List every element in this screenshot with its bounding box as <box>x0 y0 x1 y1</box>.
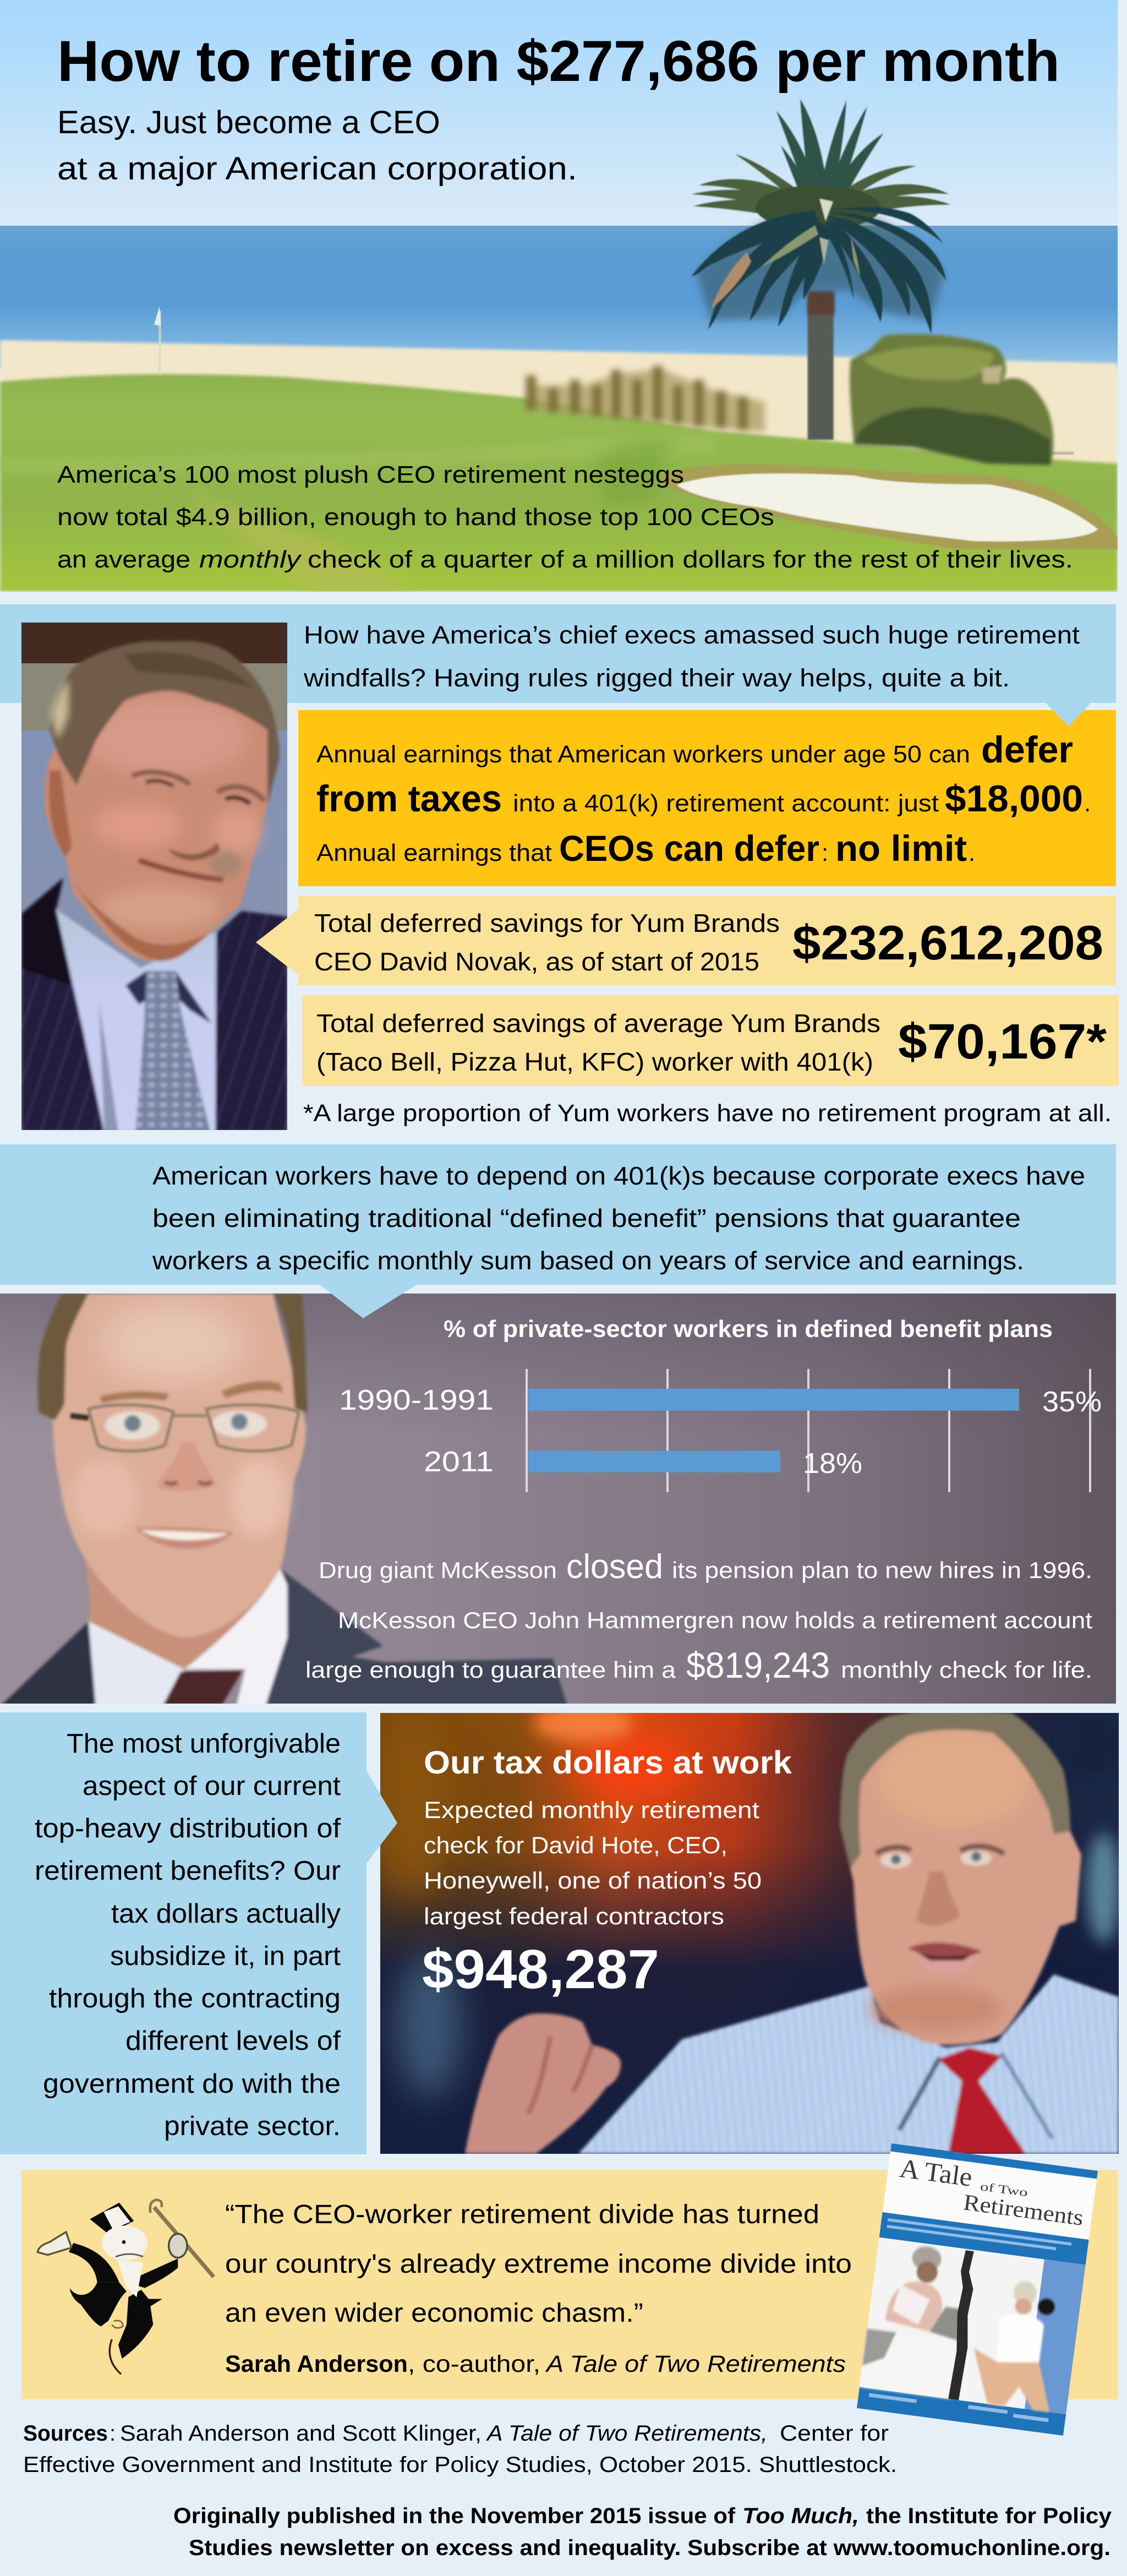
question text: windfalls? Having rules rigged their way helps, quite a bit. <box>303 664 1010 692</box>
worker savings figure: $70,167* <box>898 1014 1107 1069</box>
sources: : <box>110 2421 116 2446</box>
deferral text: . <box>1084 790 1091 817</box>
question text: How have America’s chief execs amassed such huge retirement <box>304 621 1080 649</box>
quote text: our country's already extreme income divide into <box>225 2250 852 2279</box>
publication credit: Originally published in the November 2015 issue of <box>173 2504 736 2528</box>
publication credit: Studies newsletter on excess and inequality. Subscribe at www.toomuchonline.org. <box>189 2536 1110 2560</box>
sources: Sources <box>23 2421 108 2446</box>
deferral text: $18,000 <box>945 778 1083 820</box>
intro text: check of a quarter of a million dollars for the rest of their lives. <box>308 546 1073 573</box>
bar: 1990-1991: 1990-1991 <box>339 1384 494 1416</box>
description: largest federal contractors <box>424 1903 724 1930</box>
subsidy text: aspect of our current <box>83 1771 341 1801</box>
Novak savings label: CEO David Novak, as of start of 2015 <box>314 947 759 976</box>
illustration: report cover, A Tale of Two Retirements: Retirements <box>962 2190 1085 2230</box>
worker savings label <box>316 1009 880 1076</box>
quote text: “The CEO-worker retirement divide has turned <box>225 2200 819 2229</box>
pension text: workers a specific monthly sum based on years of service and earnings. <box>152 1246 1024 1275</box>
bar: 1990-1991: 35% <box>1042 1386 1102 1418</box>
subsidy text <box>35 1729 341 2141</box>
McKesson text: monthly check for life. <box>841 1657 1092 1683</box>
footnote: *A large proportion of Yum workers have no retirement program at all. <box>303 1100 1112 1127</box>
subtitle: at a major American corporation. <box>57 151 577 187</box>
deferral text: : <box>822 839 828 866</box>
description: Expected monthly retirement <box>424 1797 759 1824</box>
icon: Monopoly man <box>37 2200 214 2374</box>
question text <box>303 621 1080 692</box>
panel: John Hammergren photo with chart <box>0 1294 1116 1706</box>
bar: 1990-1991 <box>339 1384 1102 1418</box>
pension text: American workers have to depend on 401(k)s because corporate execs have <box>152 1161 1085 1190</box>
publication credit: the Institute for Policy <box>866 2504 1112 2528</box>
chart title: % of private-sector workers in defined benefit plans <box>444 1316 1053 1342</box>
deferral text: Annual earnings that <box>316 839 552 866</box>
subsidy text: tax dollars actually <box>111 1899 341 1929</box>
panel: hero beach photo with title <box>0 0 1118 592</box>
attribution: , co-author, <box>408 2351 540 2377</box>
subtitle: Easy. Just become a CEO <box>57 105 440 140</box>
deferral text: no limit <box>835 828 967 869</box>
sources: Effective Government and Institute for Policy Studies, October 2015. Shuttlestock. <box>23 2453 897 2477</box>
McKesson text: McKesson CEO John Hammergren now holds a retirement account <box>338 1607 1092 1633</box>
illustration: report cover, A Tale of Two Retirements: of Two <box>980 2180 1028 2200</box>
subsidy text: government do with the <box>43 2069 341 2099</box>
subsidy text: subsidize it, in part <box>110 1941 341 1971</box>
worker savings label: Total deferred savings of average Yum Brands <box>316 1009 880 1038</box>
intro text: now total $4.9 billion, enough to hand those top 100 CEOs <box>57 504 774 531</box>
intro text: America’s 100 most plush CEO retirement nesteggs <box>57 461 684 488</box>
worker savings label: (Taco Bell, Pizza Hut, KFC) worker with 401(k) <box>316 1047 873 1076</box>
attribution: A Tale of Two Retirements <box>545 2351 846 2377</box>
McKesson text: large enough to guarantee him a <box>305 1657 676 1683</box>
bar: 2011 <box>424 1446 862 1480</box>
subsidy text: top-heavy distribution of <box>35 1814 341 1843</box>
bar chart: defined benefit coverage <box>339 1369 1102 1492</box>
deferral text: from taxes <box>316 778 502 820</box>
subsidy text: different levels of <box>125 2026 341 2056</box>
panel: yellow 401(k) vs CEO deferral rules <box>298 710 1116 886</box>
sources: A Tale of Two Retirements, <box>486 2421 768 2446</box>
McKesson text: $819,243 <box>686 1645 830 1685</box>
McKesson text: closed <box>566 1548 663 1586</box>
intro text: monthly <box>199 546 303 573</box>
publication credit: Too Much, <box>742 2504 859 2528</box>
Novak savings label: Total deferred savings for Yum Brands <box>314 909 780 937</box>
attribution: Sarah Anderson <box>225 2351 408 2377</box>
intro text: an average <box>57 546 190 573</box>
illustration: report cover, A Tale of Two Retirements <box>857 2143 1098 2436</box>
photo: David Novak portrait <box>21 623 287 1132</box>
panel: quote <box>21 2170 1118 2399</box>
sources: Sarah Anderson and Scott Klinger, <box>120 2421 482 2446</box>
subsidy text: retirement benefits? Our <box>35 1856 341 1886</box>
illustration: report cover, A Tale of Two Retirements: A Tale <box>898 2153 974 2192</box>
description: Honeywell, one of nation’s 50 <box>424 1868 762 1894</box>
photo: John Hammergren portrait <box>0 1294 1116 1706</box>
sources <box>23 2421 897 2477</box>
subsidy text: The most unforgivable <box>67 1729 341 1759</box>
attribution <box>225 2351 846 2377</box>
panel: tax subsidy text <box>0 1712 397 2154</box>
panel: David Cote photo with tax dollars text <box>374 1704 1127 2154</box>
Novak savings figure: $232,612,208 <box>792 915 1103 970</box>
deferral text: Annual earnings that American workers under age 50 can <box>316 741 970 768</box>
title: How to retire on $277,686 per month <box>57 29 1060 94</box>
panel: average worker savings <box>302 995 1119 1086</box>
sources: Center for <box>780 2421 889 2446</box>
quote text <box>225 2200 852 2328</box>
subtitle <box>57 105 577 187</box>
subsidy text: private sector. <box>164 2111 341 2141</box>
panel: question band <box>0 604 1116 703</box>
photo: Honeywell CEO portrait <box>374 1704 1127 2154</box>
panel: pension explanation band <box>0 1144 1116 1285</box>
McKesson text: its pension plan to new hires in 1996. <box>672 1557 1092 1583</box>
bar: 2011: 18% <box>803 1448 862 1480</box>
panel: Novak deferred savings <box>256 896 1116 985</box>
subsidy text: through the contracting <box>49 1984 341 2013</box>
heading: Our tax dollars at work <box>424 1745 792 1781</box>
deferral text: CEOs can defer <box>559 828 819 869</box>
photo: golf course by the sea <box>0 0 1118 592</box>
intro text <box>57 461 1073 573</box>
pension text <box>152 1161 1085 1275</box>
deferral text: defer <box>981 729 1073 771</box>
deferral text: . <box>969 839 975 866</box>
Novak savings label <box>314 909 780 976</box>
description: check for David Hote, CEO, <box>424 1832 727 1859</box>
deferral text <box>316 729 1091 869</box>
arrow: pension band pointing to chart panel <box>320 1285 417 1318</box>
McKesson text <box>305 1548 1092 1685</box>
description <box>424 1797 762 1930</box>
quote text: an even wider economic chasm.” <box>225 2299 643 2328</box>
arrow: question band pointing to yellow box <box>1046 703 1091 727</box>
publication credit <box>173 2504 1112 2560</box>
figure: $948,287 <box>422 1939 659 2000</box>
bar: 2011: 2011 <box>424 1446 494 1478</box>
McKesson text: Drug giant McKesson <box>319 1557 557 1583</box>
deferral text: into a 401(k) retirement account: just <box>513 790 939 817</box>
pension text: been eliminating traditional “defined benefit” pensions that guarantee <box>152 1204 1021 1232</box>
